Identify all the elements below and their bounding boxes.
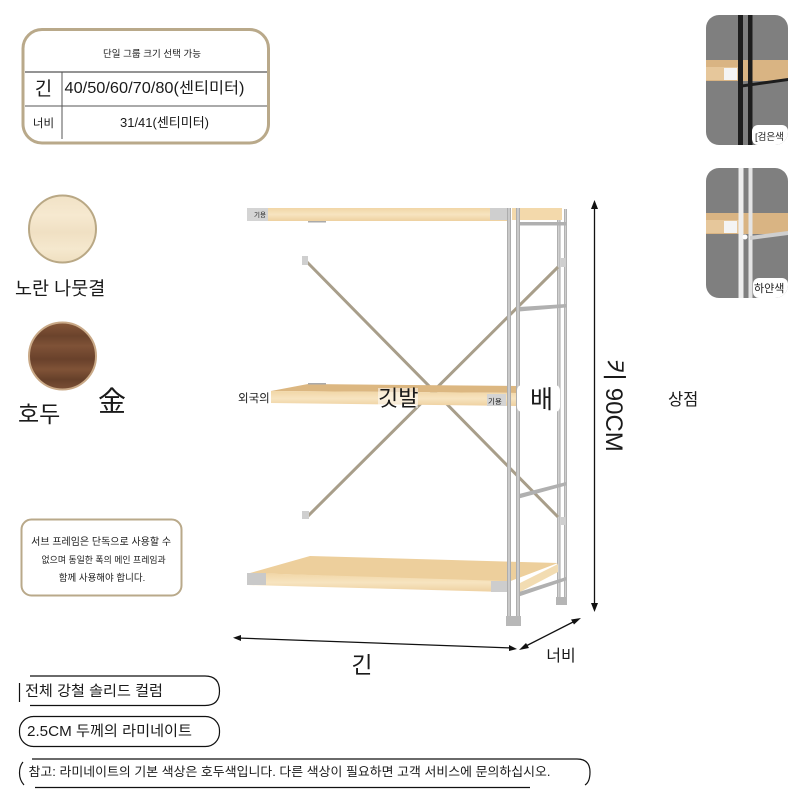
- middle shelf: [271, 383, 517, 406]
- note panel: sub frame usage: [22, 520, 182, 596]
- cross rails: [519, 222, 566, 596]
- label: yellow wood grain: 노란 나뭇결: [15, 278, 105, 299]
- note text: 없으며 동일한 폭의 메인 프레임과: [42, 554, 166, 565]
- top shelf: [247, 208, 562, 222]
- arrow: length: [233, 635, 517, 651]
- shelf product illustration: [238, 208, 567, 626]
- label: walnut: 호두: [18, 401, 60, 427]
- note text: 서브 프레임은 단독으로 사용할 수: [31, 535, 171, 548]
- size table panel: [23, 30, 268, 143]
- overlay word: times: 배: [530, 386, 553, 414]
- label: width: 너비: [546, 647, 576, 665]
- stray glyph: 金: [98, 386, 126, 417]
- note text: 함께 사용해야 합니다.: [59, 572, 145, 584]
- bracket label: 기용: [488, 397, 502, 406]
- bracket label: 기용: [254, 210, 266, 219]
- label: white: 하얀색: [754, 281, 784, 295]
- pill text: 전체 강철 솔리드 컬럼: [25, 683, 163, 700]
- bottom shelf: [247, 556, 558, 592]
- label: store: 상점: [668, 390, 698, 409]
- length values: 40/50/60/70/80(센티미터): [64, 79, 244, 97]
- pill: colour note: [20, 759, 590, 788]
- label: black: [검은색: [755, 131, 784, 143]
- thumbnail: white frame: [706, 168, 788, 298]
- pill: steel column: [20, 676, 220, 706]
- width row label: 너비: [33, 117, 54, 130]
- label: length: 긴: [351, 652, 373, 678]
- arrow: height: [591, 200, 598, 612]
- thumbnail: black frame: [706, 15, 788, 145]
- width values: 31/41(센티미터): [120, 115, 209, 130]
- length row label: 긴: [35, 78, 52, 100]
- swatch: walnut: [18, 322, 96, 427]
- swatch: yellow wood grain: [15, 196, 105, 299]
- note text: 참고: 라미네이트의 기본 색상은 호두색입니다. 다른 색상이 필요하면 고객 서비스에 문의하십시오.: [28, 765, 550, 779]
- back posts: [556, 209, 567, 605]
- diagonal braces: [302, 256, 566, 525]
- overlay word: outer: 외국의: [238, 392, 270, 405]
- front posts: [506, 208, 521, 626]
- arrow: width: [519, 618, 581, 650]
- overlay word: flag: 깃발: [378, 386, 418, 411]
- pill: laminate thickness: [20, 716, 220, 746]
- pill text: 2.5CM 두께의 라미네이트: [27, 723, 192, 740]
- table caption: 단일 그룹 크기 선택 가능: [103, 49, 201, 60]
- overlay word: times: [517, 385, 560, 414]
- label: height: 키 90CM: [600, 359, 627, 452]
